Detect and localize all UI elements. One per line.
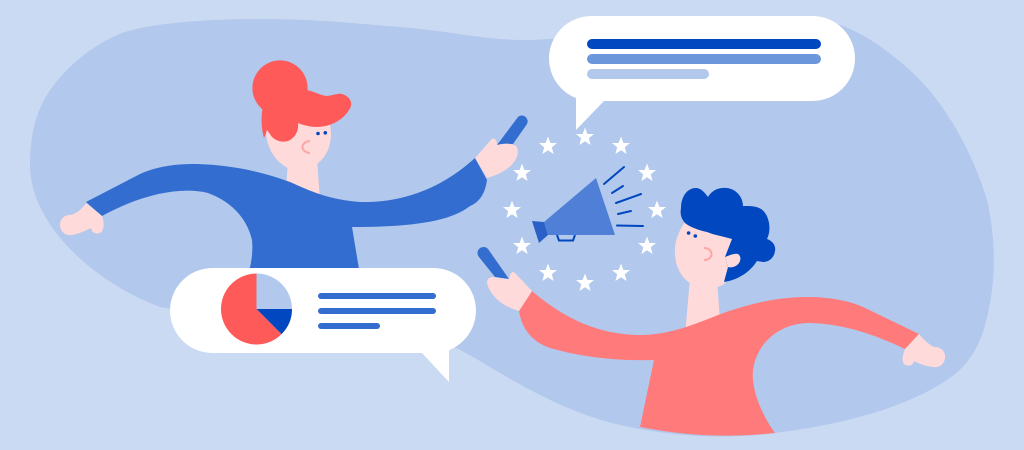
text line 2 [318,308,436,314]
right hand [903,334,945,367]
star 9 [513,236,531,254]
text line 3 [318,323,380,329]
star 10 [503,200,521,218]
ear [725,254,740,267]
character: woman [60,60,528,275]
star 7 [576,274,594,291]
speech bubble: top [549,16,855,130]
bubble body [549,16,855,101]
text line 3 [587,69,709,79]
neck [286,158,320,200]
text line 1 [318,293,436,299]
fringe [262,85,351,142]
pie slice: dark [256,309,292,334]
pencil [477,247,509,279]
pie slice: red [221,274,282,344]
ring of stars [503,128,666,291]
star 2 [612,136,630,154]
character: man [477,188,945,436]
bubble tail [422,345,449,382]
star 3 [638,164,656,181]
nose [704,248,712,260]
right hand [475,138,518,178]
handle [557,235,575,240]
star 8 [539,264,557,281]
text line 1 [587,39,821,49]
pencil [497,116,528,145]
horn [544,178,615,235]
text line 2 [587,54,821,64]
hair [681,188,775,282]
sweater [86,158,487,275]
mouthpiece [532,221,548,243]
pie chart [221,274,292,344]
sound rays [604,167,643,226]
eyes [316,131,327,135]
face [266,102,331,170]
bubble tail [576,88,605,130]
nose [302,141,310,153]
star 11 [513,164,531,181]
star 1 [576,128,594,145]
eyes [687,231,697,238]
star 5 [638,236,656,254]
sweater [519,291,919,436]
star 6 [612,264,630,281]
star 4 [648,200,666,218]
hair [252,60,351,142]
bun [252,60,308,116]
neck [685,278,720,335]
star 12 [539,136,557,154]
left hand [487,272,532,311]
left hand [60,203,104,235]
face [675,222,745,288]
bubble body [170,268,476,353]
icon: megaphone [532,167,643,243]
speech bubble: pie chart [170,268,476,382]
pie slice: light [256,274,292,309]
